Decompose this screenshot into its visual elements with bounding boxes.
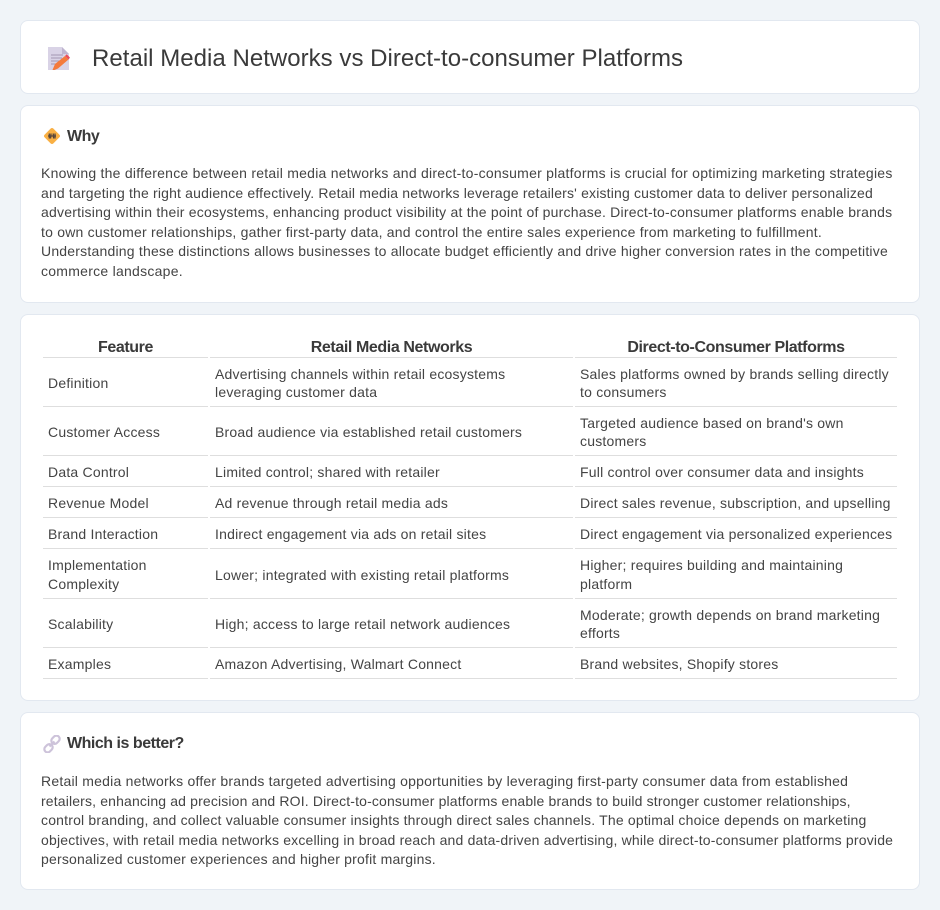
table: feature comparison: Retail Media Networks: [311, 339, 472, 356]
table: feature comparison: Lower; integrated with existing retail platforms: [215, 566, 509, 582]
table: feature comparison: Feature: [98, 339, 153, 356]
heading: why: Why: [67, 128, 99, 145]
icon: chain link: [43, 735, 61, 753]
table: feature comparison: Limited control; shared with retailer: [215, 464, 440, 480]
table: feature comparison: Definition: [48, 375, 108, 391]
text: why paragraph: to own customer relationships, gather first-party data, and control the entire sales experience from marketing to fulfillment.: [41, 224, 822, 240]
table: feature comparison: Indirect engagement via ads on retail sites: [215, 526, 486, 542]
table: feature comparison: customers: [580, 433, 646, 449]
table: feature comparison: Implementation: [48, 557, 147, 573]
title: Retail Media Networks vs Direct-to-consumer Platforms: [92, 44, 683, 72]
table: feature comparison: Moderate; growth depends on brand marketing: [580, 607, 880, 623]
table: feature comparison: efforts: [580, 625, 620, 641]
table: feature comparison: High; access to large retail network audiences: [215, 616, 510, 632]
panel: header: [20, 20, 920, 94]
table: feature comparison: [43, 339, 897, 679]
table: feature comparison: platform: [580, 576, 632, 592]
table: feature comparison: Brand websites, Shopify stores: [580, 656, 779, 672]
icon: warning diamond: [44, 128, 60, 144]
panel: comparison table: [20, 314, 920, 701]
table: feature comparison: Full control over consumer data and insights: [580, 464, 864, 480]
table: feature comparison: Direct engagement via personalized experiences: [580, 526, 892, 542]
panel: why: [20, 105, 920, 303]
table: feature comparison: Broad audience via established retail customers: [215, 424, 522, 440]
table: feature comparison: leveraging customer data: [215, 384, 377, 400]
table: feature comparison: Higher; requires building and maintaining: [580, 557, 843, 573]
table: feature comparison: Sales platforms owned by brands selling directly: [580, 366, 889, 382]
table: feature comparison: Complexity: [48, 576, 119, 592]
table: feature comparison: Data Control: [48, 464, 129, 480]
table: feature comparison: Brand Interaction: [48, 526, 158, 542]
table: feature comparison: Direct-to-Consumer Platforms: [627, 339, 845, 356]
heading: which is better: Which is better?: [67, 735, 184, 752]
table: feature comparison: to consumers: [580, 384, 667, 400]
table: feature comparison: Direct sales revenue, subscription, and upselling: [580, 495, 891, 511]
text: why paragraph: commerce landscape.: [41, 263, 183, 279]
table: feature comparison: Amazon Advertising, Walmart Connect: [215, 656, 462, 672]
panel: which is better: [20, 712, 920, 890]
text: why paragraph: [41, 165, 893, 279]
text: why paragraph: Understanding these distinctions allows businesses to allocate budget efficiently and drive higher conversion rates in the competitive: [41, 243, 888, 259]
table: feature comparison: Targeted audience based on brand's own: [580, 415, 844, 431]
text: why paragraph: and targeting the right audience effectively. Retail media networks leverage retailers' existing customer data to deliver personalized: [41, 185, 873, 201]
text: which is better paragraph: personalized customer experiences and higher profit margins.: [41, 851, 436, 867]
text: which is better paragraph: objectives, with retail media networks excelling in broad reach and data-driven advertising, while direct-to-consumer platforms provide: [41, 832, 893, 848]
text: which is better paragraph: retailers, enhancing ad precision and ROI. Direct-to-consumer platforms enable brands to build stronger customer relationships,: [41, 793, 851, 809]
table: feature comparison: Customer Access: [48, 424, 160, 440]
table: feature comparison: Ad revenue through retail media ads: [215, 495, 448, 511]
text: which is better paragraph: control branding, and collect valuable consumer insights through direct sales channels. The optimal choice depends on marketing: [41, 812, 866, 828]
table: feature comparison: Revenue Model: [48, 495, 149, 511]
table: feature comparison: Examples: [48, 656, 111, 672]
table: feature comparison: Advertising channels within retail ecosystems: [215, 366, 505, 382]
text: why paragraph: advertising within their ecosystems, enhancing product visibility at the point of purchase. Direct-to-consumer platforms enable brands: [41, 204, 892, 220]
text: which is better paragraph: Retail media networks offer brands targeted advertising opportunities by leveraging first-party consumer data from established: [41, 773, 848, 789]
table: feature comparison: Scalability: [48, 616, 113, 632]
icon: memo with pencil: [48, 47, 70, 70]
text: which is better paragraph: [41, 773, 893, 867]
text: why paragraph: Knowing the difference between retail media networks and direct-to-consumer platforms is crucial for optimizing marketing strategies: [41, 165, 893, 181]
